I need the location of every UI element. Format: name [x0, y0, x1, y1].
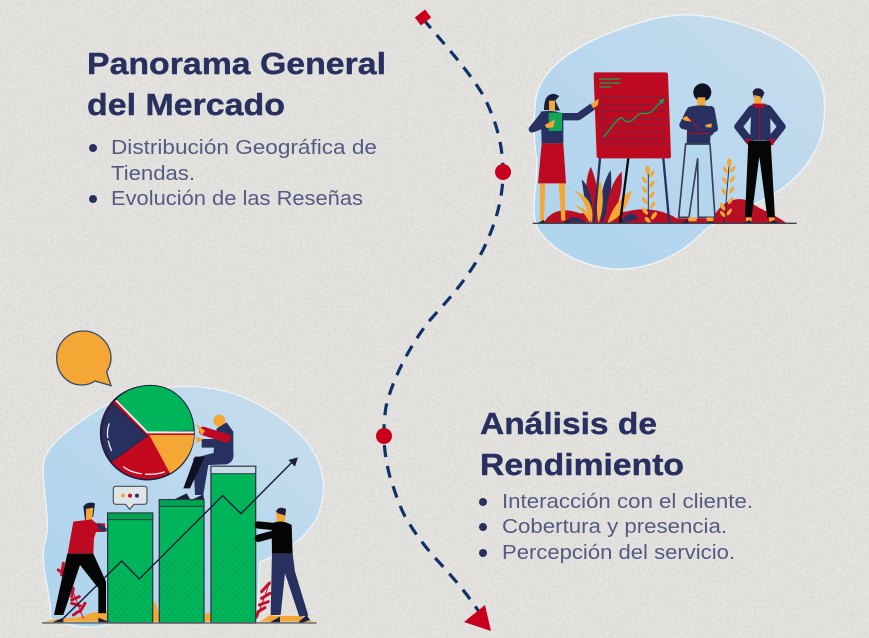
- ground line: [533, 221, 797, 225]
- blue blob background: [534, 15, 825, 269]
- message icon: [113, 486, 147, 509]
- trend arrow: [63, 457, 298, 618]
- bullet list: panorama: Distribución Geográfica de: [111, 137, 377, 159]
- wheat plant right: [719, 158, 736, 223]
- route midpoint marker upper: [495, 164, 511, 180]
- bar 3: [211, 466, 256, 623]
- man in red pushing: [53, 503, 108, 622]
- illustration: performance team: [42, 331, 323, 627]
- heading: rendimiento: Análisis de: [480, 406, 657, 441]
- heading: panorama: del Mercado: [87, 87, 285, 122]
- standing man with crossed arms: [679, 83, 717, 223]
- red plant left: [58, 563, 85, 618]
- wheat plant centre: [641, 166, 658, 224]
- standing man hands on hips: [738, 88, 782, 223]
- seated man: [175, 415, 234, 499]
- bullet list: panorama: [89, 137, 377, 210]
- ground hills: [45, 602, 313, 622]
- route start marker: [415, 10, 431, 25]
- bullet list: rendimiento: Percepción del servicio.: [502, 542, 735, 564]
- heading: panorama: [87, 46, 386, 122]
- ground hills: [543, 199, 787, 223]
- pie chart: [101, 385, 194, 480]
- presenter woman: [532, 94, 599, 223]
- route midpoint marker lower: [376, 428, 392, 444]
- bullet list: rendimiento: [479, 491, 753, 564]
- plant: [567, 167, 638, 223]
- illustration: presentation team: [532, 15, 825, 269]
- blue blob background: [43, 386, 323, 627]
- dashed route line: [384, 19, 503, 613]
- bullet list: rendimiento: Interacción con el cliente.: [502, 491, 753, 513]
- heading: panorama: Panorama General: [87, 46, 386, 81]
- bullet list: rendimiento: Cobertura y presencia.: [502, 516, 727, 538]
- route end arrowhead: [464, 605, 491, 631]
- bar 1: [108, 513, 153, 623]
- speech bubble: [57, 331, 111, 386]
- heading: rendimiento: [480, 406, 684, 482]
- heading: rendimiento: Rendimiento: [480, 447, 684, 482]
- red plant right: [257, 582, 270, 618]
- ground line: [42, 621, 317, 625]
- bar 2: [159, 500, 204, 623]
- man in black pushing: [258, 508, 310, 623]
- bullet list: panorama: Tiendas.: [111, 163, 195, 185]
- chart board: [594, 72, 671, 158]
- easel legs: [594, 158, 669, 223]
- bullet list: panorama: Evolución de las Reseñas: [111, 188, 363, 210]
